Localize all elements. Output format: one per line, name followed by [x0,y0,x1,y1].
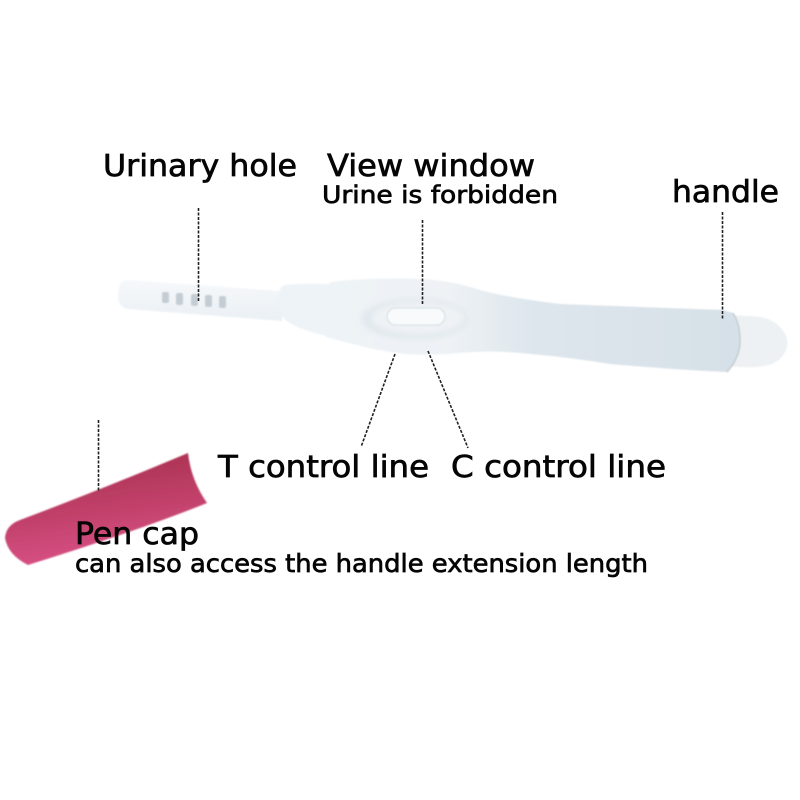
view window recess [361,298,469,340]
collar [278,284,332,337]
urine stick with holes [118,280,282,321]
handle end cap [725,315,787,367]
note: urine is forbidden: Urine is forbidden [322,181,558,209]
pregnancy test pen [118,278,787,372]
handle body [324,278,740,372]
label: C control line: C control line [451,450,666,485]
label: T control line: T control line [217,450,429,485]
pen cap [5,453,207,565]
label: pen cap: Pen cap [75,517,199,552]
leader lines [98,208,722,491]
label: handle: handle [672,175,779,210]
label: view window: View window [327,149,535,184]
label: urinary hole: Urinary hole [103,149,297,184]
note: handle extension: can also access the handle extension length [75,549,648,578]
